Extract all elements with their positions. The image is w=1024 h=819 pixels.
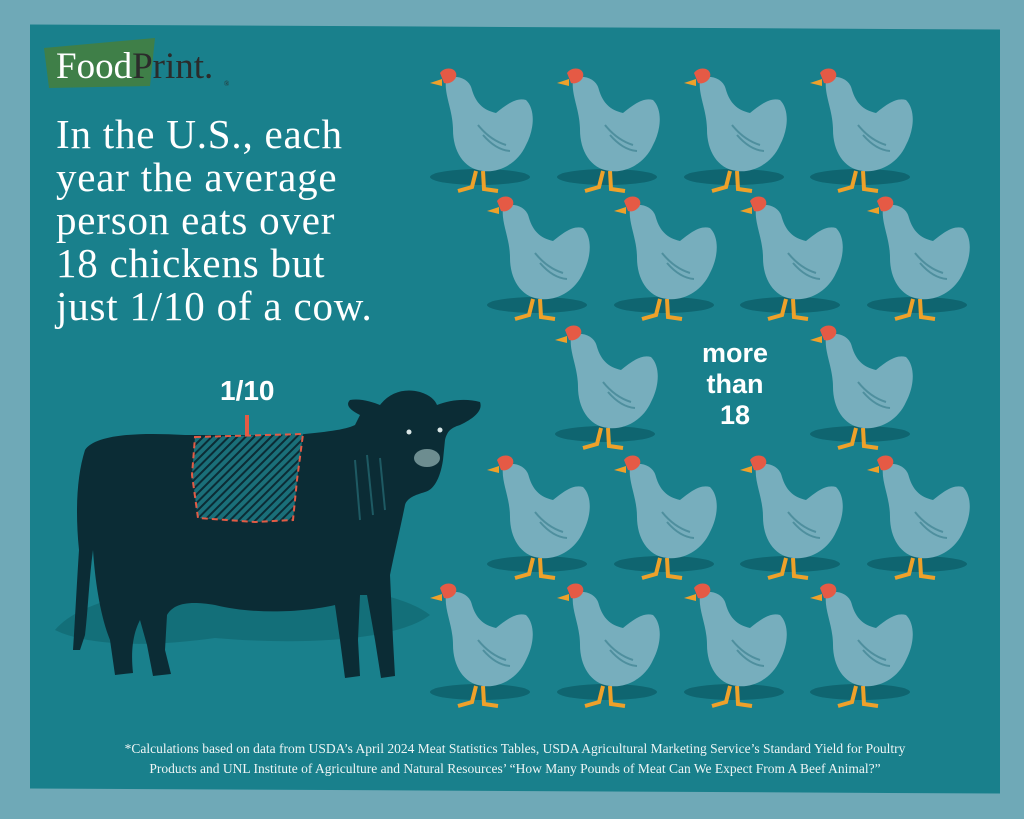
title text: year the average xyxy=(56,154,337,200)
row 4 xyxy=(487,456,970,578)
hatched 1/10 area xyxy=(192,415,303,522)
footnote: Products and UNL Institute of Agriculture and Natural Resources’ “How Many Pounds of Meat Can We Expect From A Beef Animal?” xyxy=(149,761,881,776)
row 1 xyxy=(430,68,913,191)
footnote: *Calculations based on data from USDA’s April 2024 Meat Statistics Tables, USDA Agricultural Marketing Service’s Standard Yield for Poultry xyxy=(125,741,905,756)
title text: 18 chickens but xyxy=(56,240,325,286)
row 5 xyxy=(430,584,913,706)
label: 1/10: 1/10 xyxy=(220,375,274,406)
label: more than 18: 18 xyxy=(720,400,750,430)
label: more than 18 xyxy=(702,338,768,430)
logo xyxy=(44,38,229,88)
shadow xyxy=(55,586,430,644)
logo: FoodPrint. xyxy=(56,46,213,87)
title text: person eats over xyxy=(56,197,335,243)
logo: ® xyxy=(224,80,229,88)
label: more than 18: than xyxy=(706,369,764,399)
cow illustration xyxy=(55,375,481,678)
row 2 xyxy=(487,196,970,319)
footnote xyxy=(125,741,906,776)
title text xyxy=(54,111,373,329)
title text: just 1/10 of a cow. xyxy=(56,283,373,329)
cow face details xyxy=(414,449,440,467)
title text: In the U.S., each xyxy=(56,111,343,157)
label: more than 18: more xyxy=(702,338,768,368)
row 3 xyxy=(555,326,913,448)
